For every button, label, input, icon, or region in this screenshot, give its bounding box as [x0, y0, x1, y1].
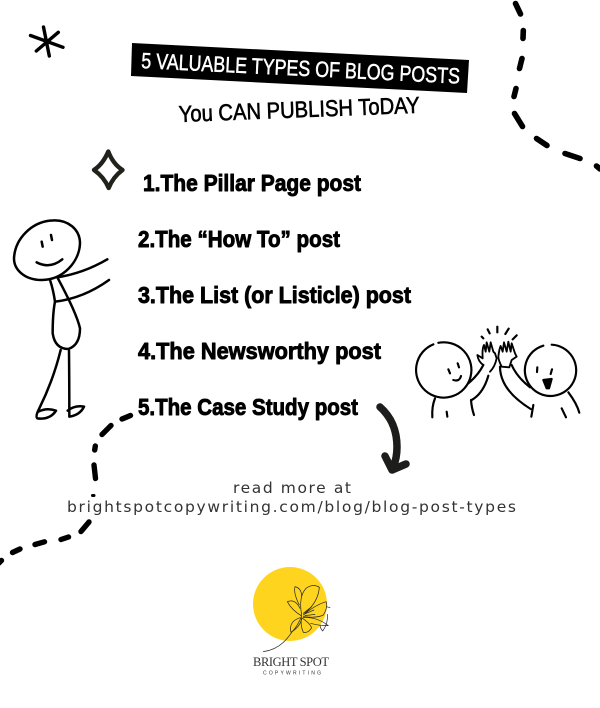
logo sun circle	[253, 567, 327, 641]
list of blog post types	[138, 170, 411, 420]
icon: four point sparkle	[94, 152, 122, 188]
list item 2: 2.The “How To” post	[138, 226, 340, 252]
list item 1: 1.The Pillar Page post	[143, 170, 361, 196]
icon: dashed curve top right	[514, 4, 600, 169]
logo wordmark: BRIGHT SPOT	[253, 655, 329, 669]
subtitle: You CAN PUBLISH ToDAY	[178, 92, 420, 127]
read more text: brightspotcopywriting.com/blog/blog-post-types	[67, 498, 516, 516]
spark lines	[482, 327, 517, 339]
title banner: 5 VALUABLE TYPES OF BLOG POSTS	[141, 48, 461, 89]
left person	[416, 342, 488, 417]
read more text: read more at	[233, 479, 351, 497]
clapping hands	[477, 342, 517, 372]
icon: dashed curve lower left	[0, 416, 130, 563]
logo: bright spot copywriting	[253, 567, 330, 676]
list item 3: 3.The List (or Listicle) post	[138, 282, 411, 308]
logo flower	[263, 586, 330, 652]
read more text	[67, 479, 516, 516]
list item 4: 4.The Newsworthy post	[138, 338, 381, 364]
illustration: stick figure	[14, 220, 109, 419]
right person	[500, 345, 579, 417]
arrow	[380, 407, 406, 470]
icon: asterisk star	[30, 27, 63, 56]
list item 5: 5.The Case Study post	[138, 394, 358, 420]
illustration: two people high five	[416, 327, 579, 417]
logo tagline: COPYWRITING	[263, 670, 321, 676]
